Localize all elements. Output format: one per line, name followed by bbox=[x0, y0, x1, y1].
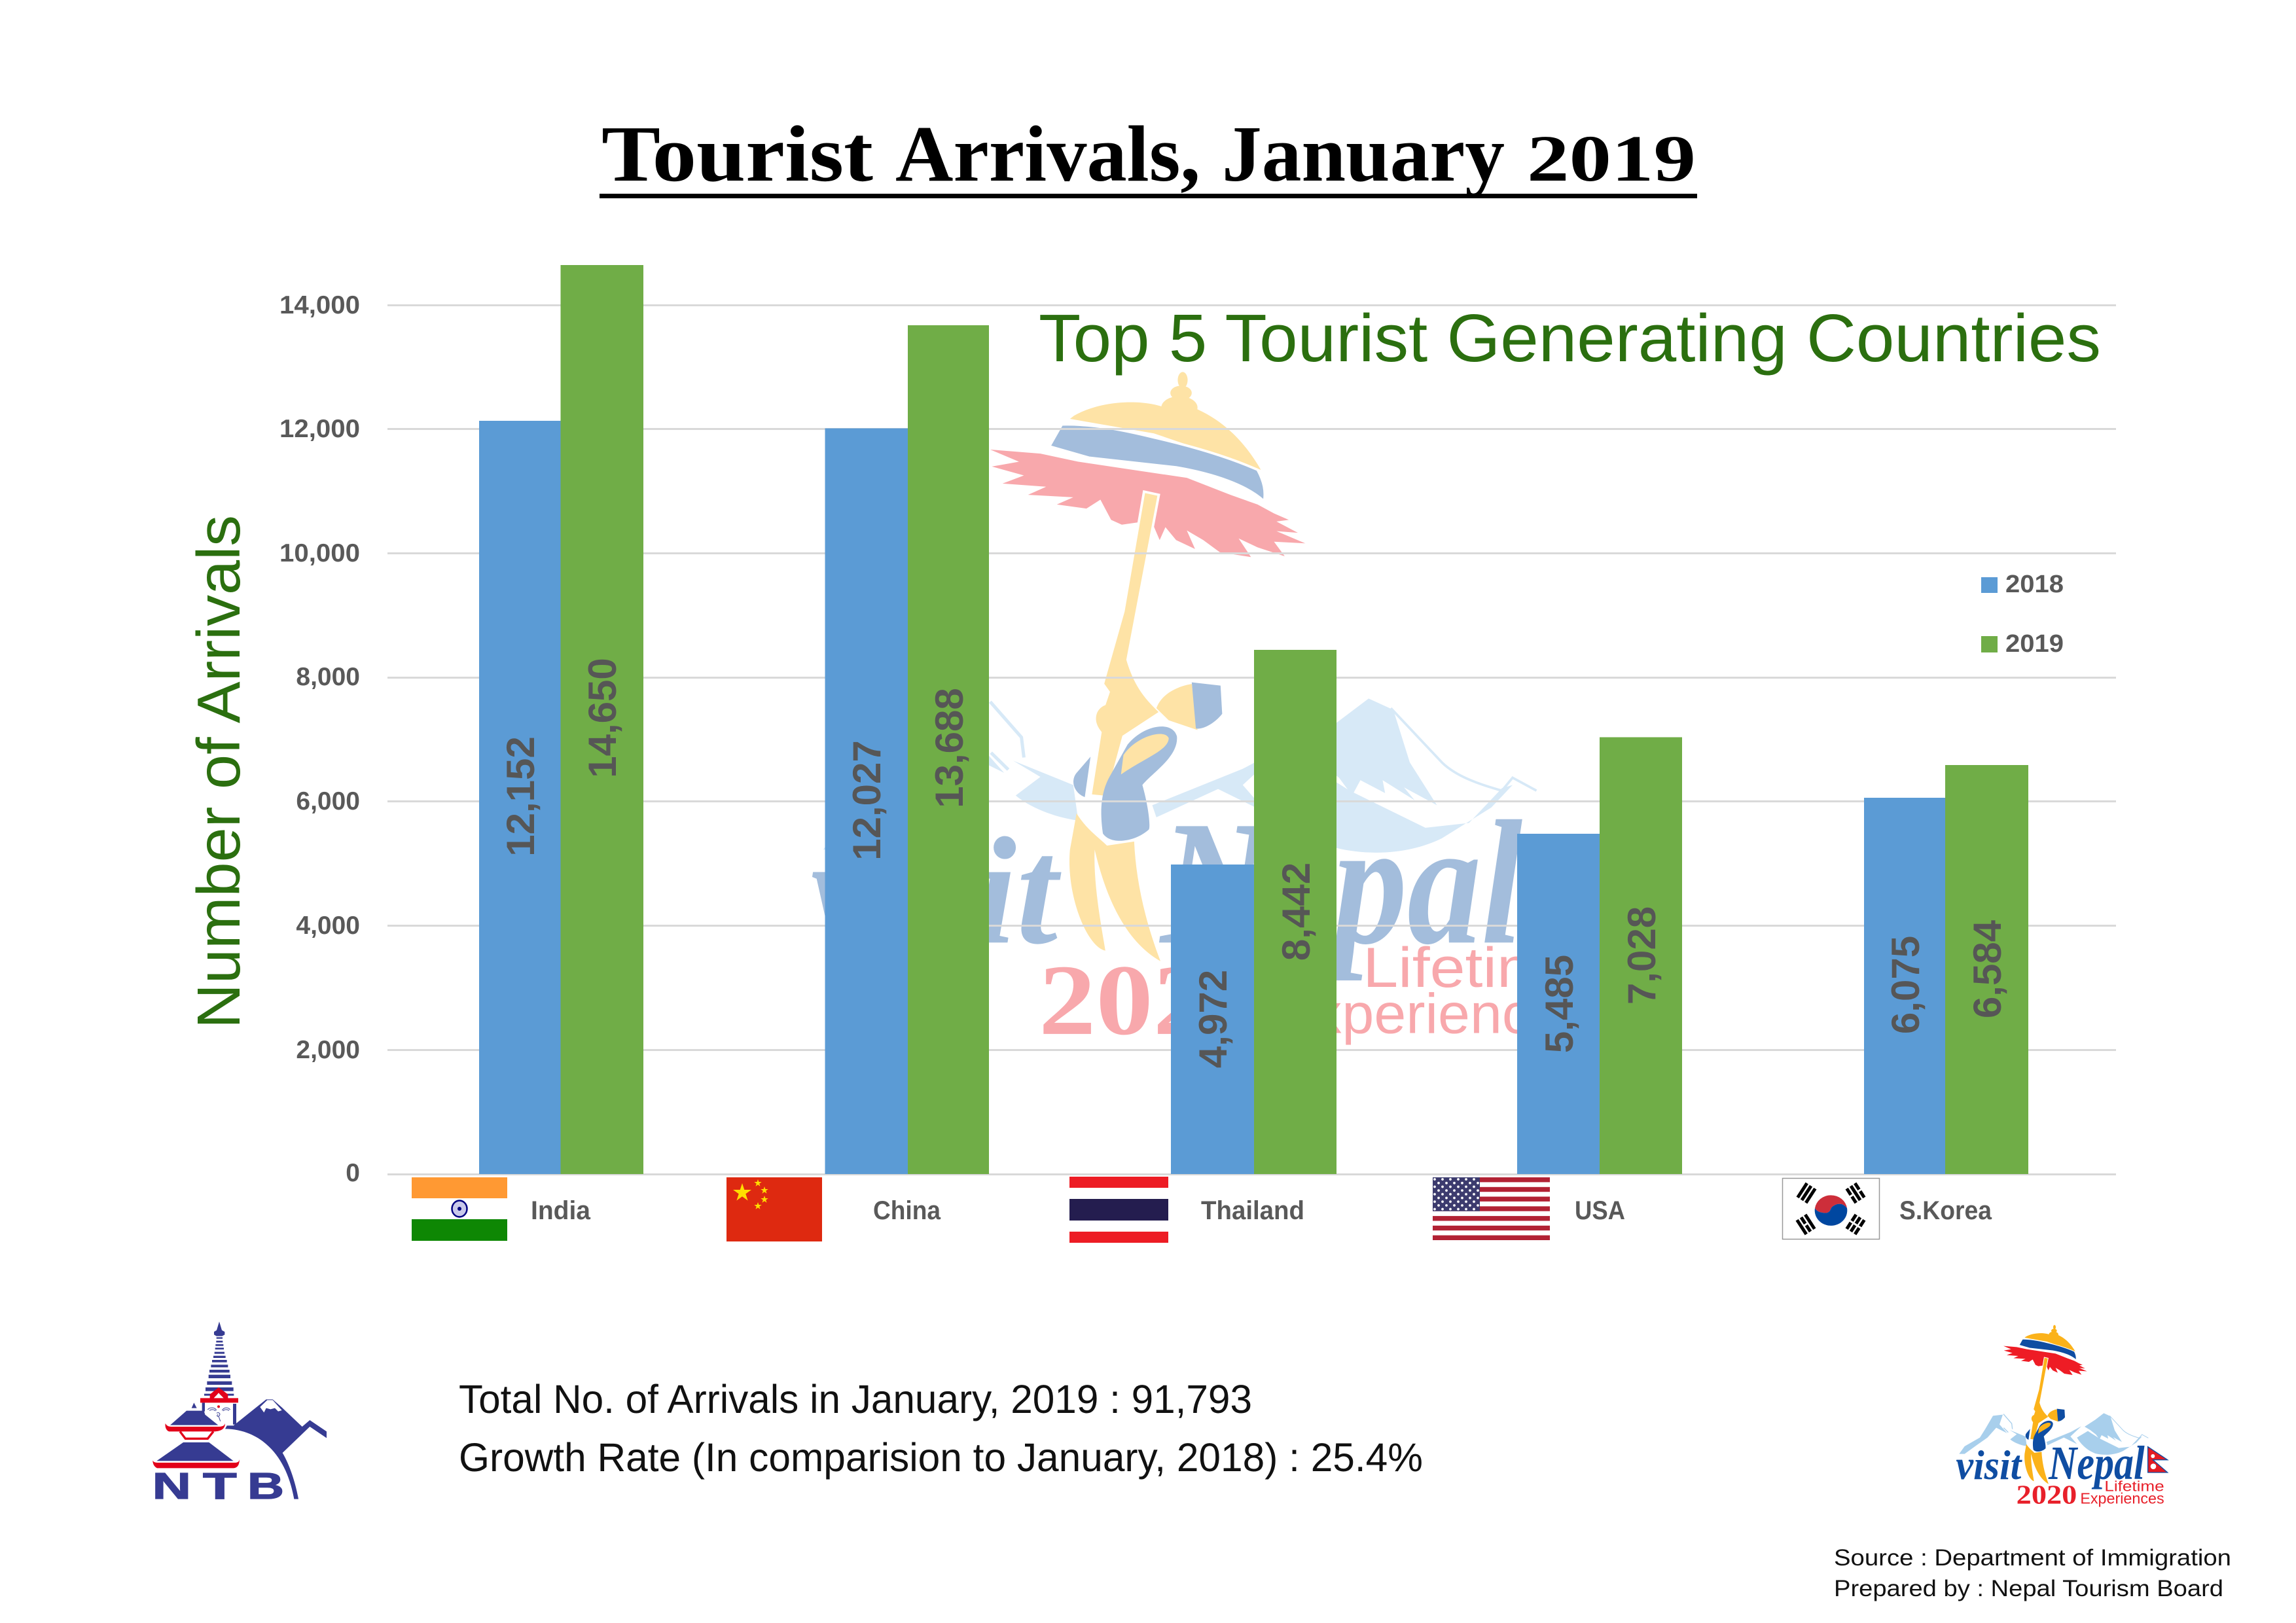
bars: India: 14,650 bbox=[581, 658, 624, 778]
title: 2019 bbox=[1527, 122, 1696, 195]
icon: Visit Nepal 2020 logo: Experiences bbox=[2080, 1489, 2164, 1507]
y axis tick labels: 2,000 bbox=[296, 1036, 360, 1064]
watermark: Visit Nepal 2020 logo: Experiences bbox=[1275, 982, 1592, 1045]
watermark: Visit Nepal 2020 logo: 2020 bbox=[1039, 944, 1267, 1056]
watermark: Visit Nepal 2020 logo: Nepal bbox=[1158, 785, 1523, 982]
icon: NTB logo bbox=[152, 1321, 327, 1507]
icon: China flag bbox=[726, 1177, 822, 1241]
title: January bbox=[1222, 110, 1505, 198]
icon: South Korea flag bbox=[1783, 1178, 1880, 1240]
title: Arrivals, bbox=[895, 110, 1200, 198]
icon: Visit Nepal 2020 logo: Nepal bbox=[2048, 1436, 2145, 1489]
summary text bbox=[459, 1377, 1423, 1480]
source note: Prepared by : Nepal Tourism Board bbox=[1834, 1576, 2223, 1601]
y axis tick labels: 12,000 bbox=[279, 415, 360, 443]
icon: Visit Nepal 2020 logo bbox=[1956, 1325, 2168, 1510]
legend: 2018 bbox=[2005, 571, 2064, 598]
icon: Visit Nepal 2020 logo: Lifetime bbox=[2104, 1478, 2164, 1494]
watermark: Visit Nepal 2020 logo: Lifetime bbox=[1363, 936, 1585, 999]
icon: Thailand flag bbox=[1069, 1177, 1168, 1243]
icon: Visit Nepal 2020 logo: visit bbox=[1956, 1442, 2023, 1488]
bars: USA bbox=[1517, 737, 1682, 1174]
label: China: China bbox=[873, 1196, 941, 1225]
icon: NTB logo: N bbox=[152, 1465, 191, 1507]
summary text: Total No. of Arrivals in January, 2019 : 91,793 bbox=[459, 1377, 1252, 1421]
title bbox=[600, 110, 1697, 198]
bars: USA: 7,028 bbox=[1620, 906, 1664, 1005]
label: Thailand: Thailand bbox=[1201, 1196, 1304, 1225]
label: India: India bbox=[531, 1196, 591, 1225]
bars: China: 12,027 bbox=[845, 740, 889, 861]
y axis tick labels: 10,000 bbox=[279, 539, 360, 567]
y axis tick labels: 4,000 bbox=[296, 912, 360, 940]
bars: China: 13,688 bbox=[927, 688, 971, 808]
watermark: Visit Nepal 2020 logo: visit bbox=[811, 806, 1062, 976]
y axis tick labels: 6,000 bbox=[296, 787, 360, 815]
label: S.Korea: S.Korea bbox=[1899, 1196, 1992, 1225]
bars: Thailand bbox=[1171, 650, 1336, 1174]
bars: S.Korea bbox=[1864, 765, 2028, 1174]
bars: India bbox=[479, 265, 643, 1174]
title: Tourist bbox=[601, 110, 873, 198]
bar chart bbox=[279, 265, 2116, 1187]
y axis tick labels bbox=[279, 291, 360, 1187]
source note bbox=[1834, 1545, 2231, 1601]
icon: NTB logo: T bbox=[203, 1465, 237, 1507]
icon: India flag bbox=[412, 1177, 507, 1241]
y axis tick labels: 0 bbox=[346, 1159, 360, 1187]
chart subtitle: Top 5 Tourist Generating Countries bbox=[1039, 300, 2101, 376]
bars: USA: 5,485 bbox=[1537, 955, 1581, 1053]
icon: USA flag bbox=[1433, 1177, 1550, 1240]
source note: Source : Department of Immigration bbox=[1834, 1545, 2231, 1571]
icon: Visit Nepal 2020 logo: 2020 bbox=[2017, 1480, 2077, 1510]
icon: NTB logo: B bbox=[247, 1465, 284, 1507]
bars: S.Korea: 6,584 bbox=[1965, 919, 2009, 1018]
y axis tick labels: 8,000 bbox=[296, 663, 360, 691]
bars: India: 12,152 bbox=[499, 736, 543, 857]
summary text: Growth Rate (In comparision to January, 2018) : 25.4% bbox=[459, 1435, 1423, 1480]
bars: Thailand: 8,442 bbox=[1274, 863, 1318, 961]
bars: S.Korea: 6,075 bbox=[1884, 936, 1928, 1034]
label: USA: USA bbox=[1575, 1196, 1625, 1225]
y axis tick labels: 14,000 bbox=[279, 291, 360, 319]
legend: 2019 bbox=[2005, 630, 2064, 658]
legend bbox=[1981, 571, 2064, 658]
watermark: Visit Nepal 2020 logo bbox=[811, 372, 1592, 1056]
bars: Thailand: 4,972 bbox=[1191, 970, 1235, 1068]
y axis title: Number of Arrivals bbox=[185, 515, 253, 1029]
bars: China bbox=[825, 325, 989, 1174]
